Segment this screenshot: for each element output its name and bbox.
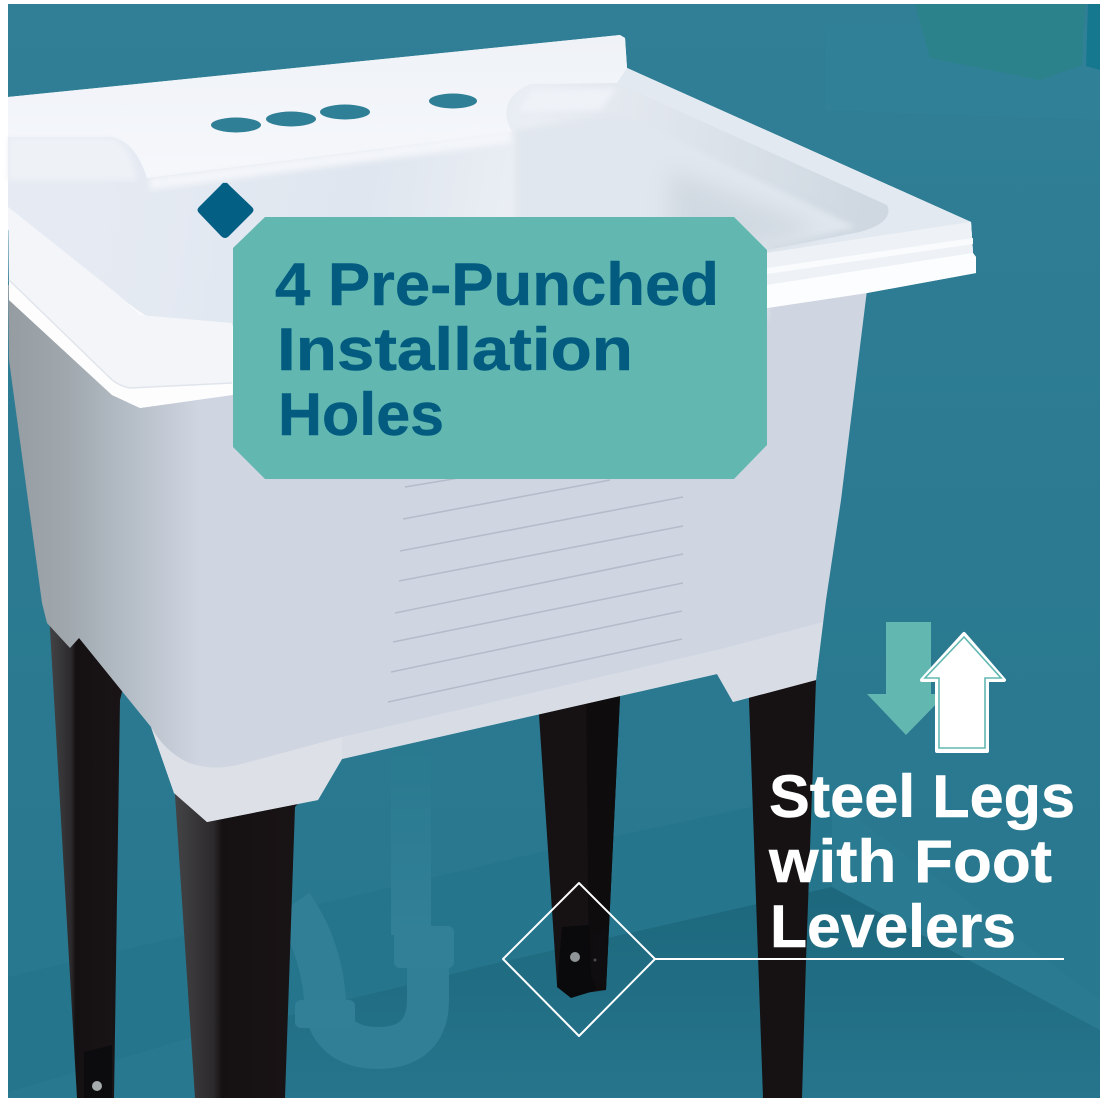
right rim top	[617, 68, 971, 253]
sink rim and basin	[8, 35, 976, 408]
icon: faucet holes	[211, 94, 477, 132]
sink rear-left leg	[49, 612, 130, 1098]
foot leveler detail	[557, 925, 606, 998]
heading: Steel Legs with Foot Levelers: Steel Legs	[769, 763, 1075, 830]
icon: white up arrow	[922, 634, 1004, 751]
louver panel	[388, 477, 683, 702]
heading: 4 Pre-Punched Installation Holes: Holes	[278, 381, 444, 448]
heading: Steel Legs with Foot Levelers	[768, 763, 1075, 960]
right front rim	[767, 222, 973, 285]
basin	[8, 83, 888, 330]
bottom lip of tub	[342, 622, 823, 759]
icon: callout diamond marker	[198, 183, 254, 238]
sink front leg	[174, 780, 320, 1098]
rim base shape	[8, 35, 976, 408]
sink right leg	[749, 660, 816, 1098]
drain pipe	[292, 745, 454, 1048]
heading: Steel Legs with Foot Levelers: Levelers	[770, 893, 1016, 960]
heading: 4 Pre-Punched Installation Holes: 4 Pre-Punched	[275, 251, 719, 318]
heading: 4 Pre-Punched Installation Holes	[275, 251, 719, 448]
sink back-right leg	[539, 680, 620, 995]
left front rim	[8, 207, 232, 388]
icon: teal down arrow	[867, 622, 946, 735]
sink tub body	[8, 285, 867, 822]
callout leader: foot leveler diamond and line	[503, 883, 1064, 1036]
callout: installation holes	[233, 217, 767, 479]
heading: 4 Pre-Punched Installation Holes: Installation	[277, 316, 633, 383]
heading: Steel Legs with Foot Levelers: with Foot	[768, 828, 1052, 895]
